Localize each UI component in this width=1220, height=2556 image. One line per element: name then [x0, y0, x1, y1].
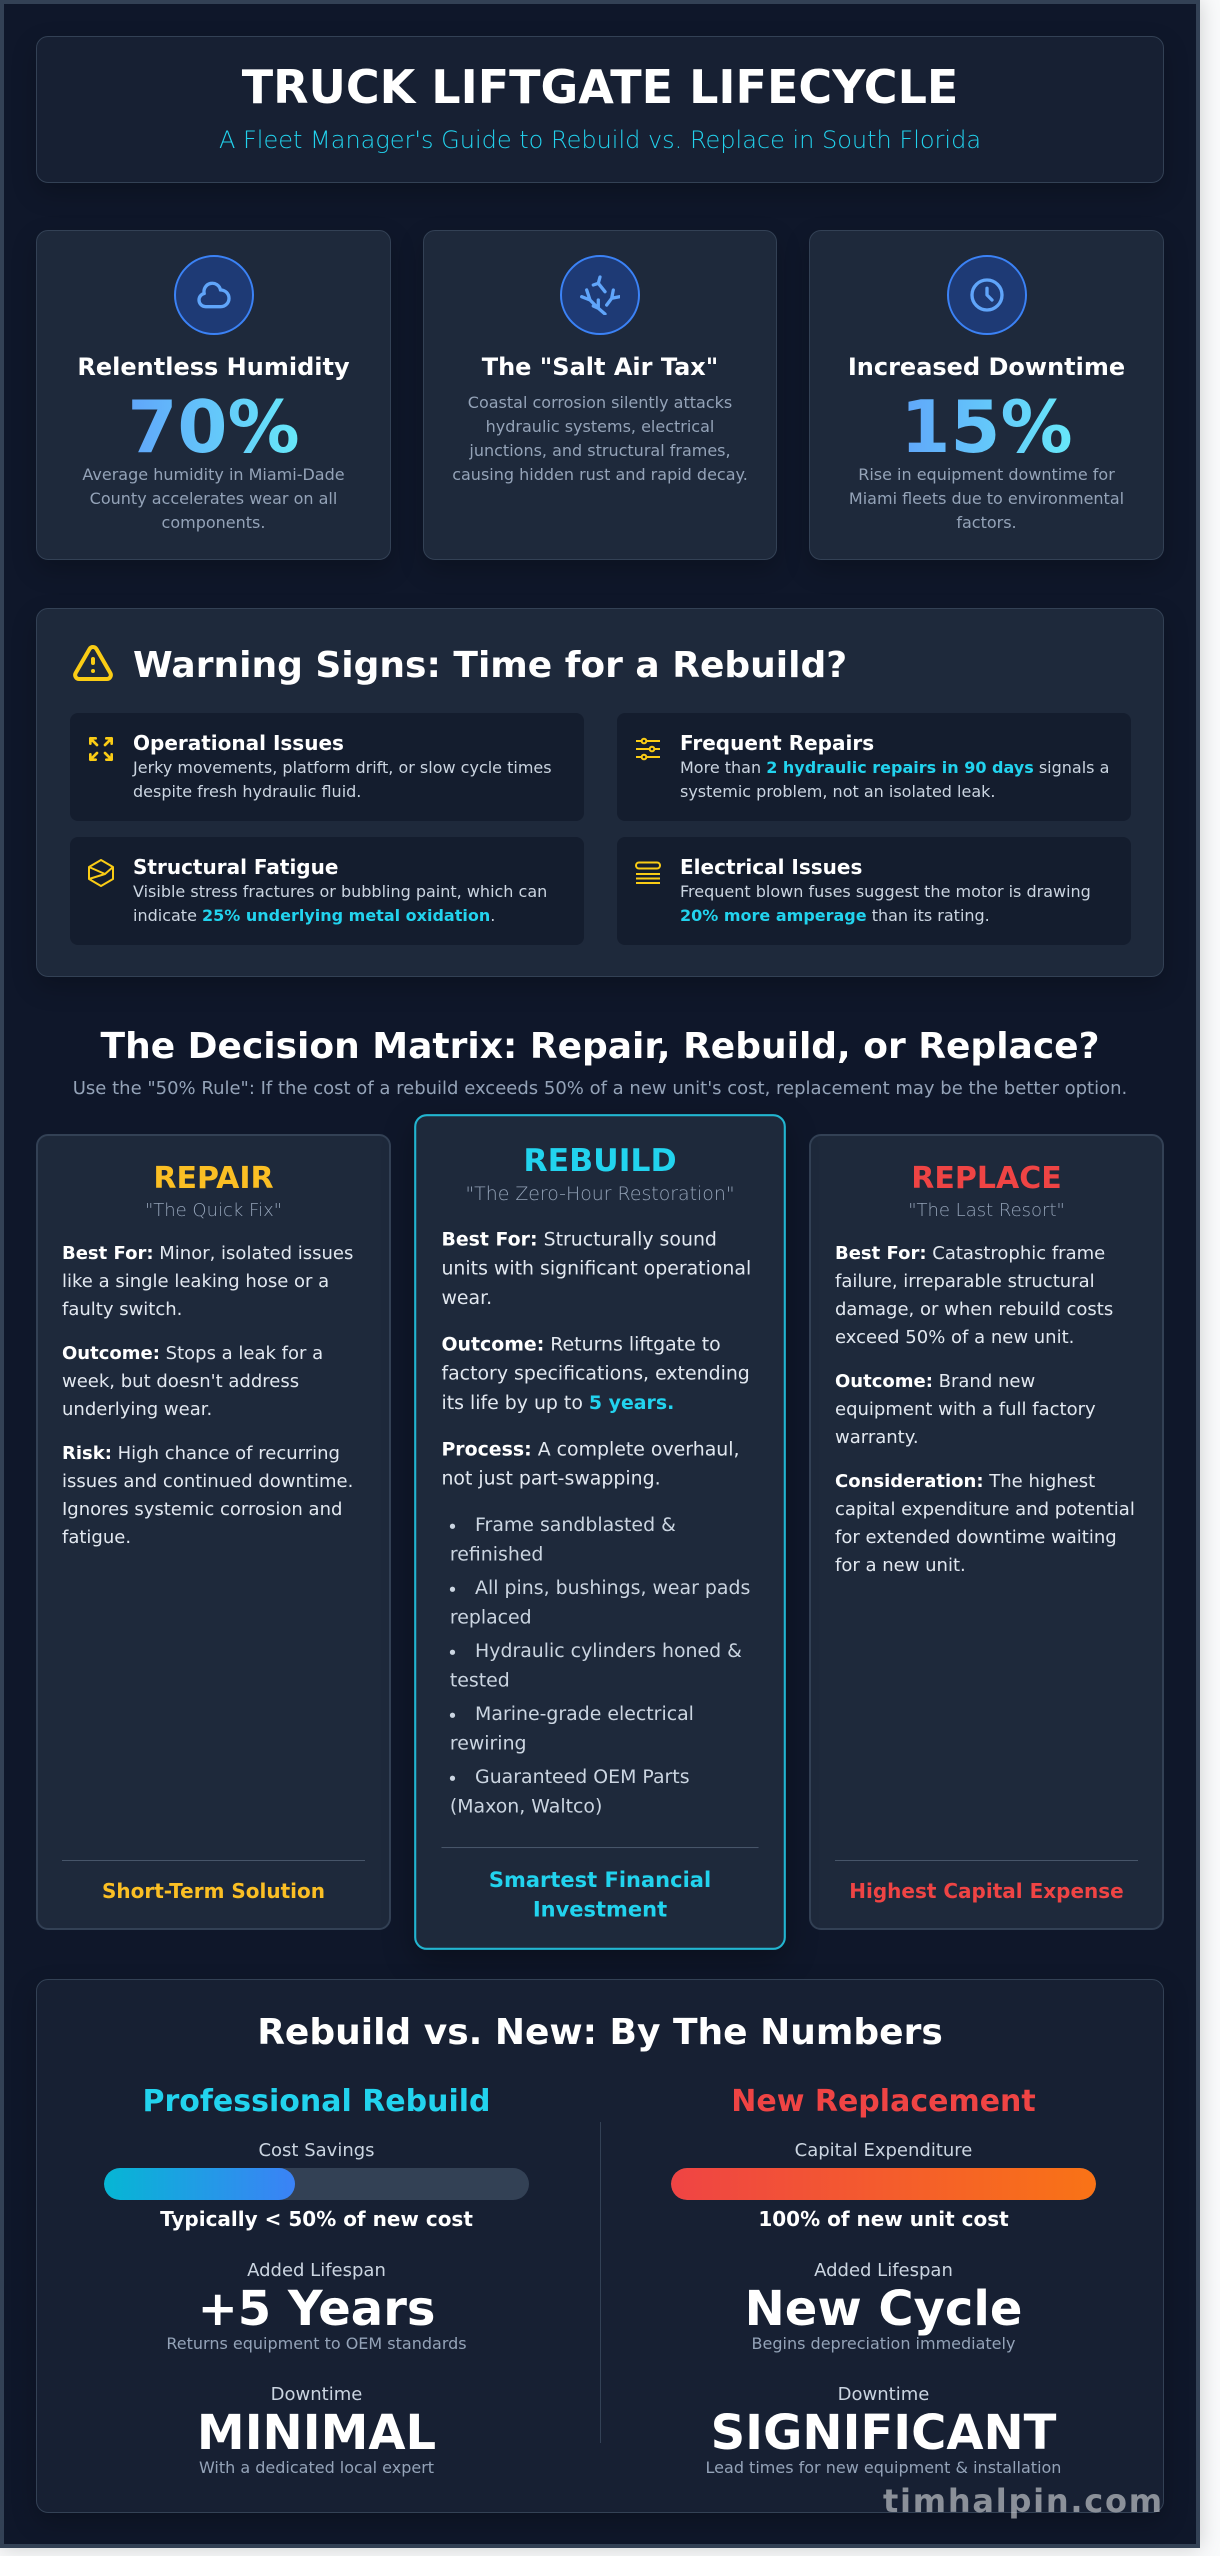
watermark: timhalpin.com	[883, 2482, 1164, 2520]
icon: sliders	[636, 738, 660, 760]
icon: hexagonal box	[88, 859, 114, 887]
note: Returns equipment to OEM standards	[166, 2334, 467, 2353]
big value: +5 Years	[198, 2281, 435, 2337]
heading: New Replacement	[731, 2084, 1036, 2119]
label: Added Lifespan	[247, 2260, 386, 2281]
heading: REPAIR	[153, 1161, 274, 1196]
text: risk: Risk: High chance of recurring issues and continued downtime. Ignores systemic corrosion and fatigue.	[62, 1443, 353, 1548]
verdict: Short-Term Solution	[102, 1879, 325, 1903]
heading: Warning Signs: Time for a Rebuild?	[133, 645, 847, 686]
value: Typically < 50% of new cost	[160, 2207, 473, 2231]
subtitle: A Fleet Manager's Guide to Rebuild vs. Replace in South Florida	[219, 126, 981, 154]
panel: increased downtime	[809, 230, 1164, 560]
label: Downtime	[838, 2384, 929, 2405]
panel: salt air tax	[423, 230, 777, 560]
icon: clock	[946, 255, 1026, 335]
numbers heading: Rebuild vs. New: By The Numbers	[257, 2012, 943, 2053]
big value: MINIMAL	[197, 2405, 436, 2461]
title: TRUCK LIFTGATE LIFECYCLE	[242, 60, 958, 114]
bar: capital expenditure 100%	[671, 2168, 1096, 2200]
item: electrical issues	[617, 837, 1131, 945]
stat: 70%: 70%	[127, 385, 300, 469]
icon: fuse stack	[635, 862, 661, 884]
label: Capital Expenditure	[795, 2140, 972, 2161]
text: Frequent blown fuses suggest the motor is drawing 20% more amperage than its rating.	[680, 882, 1091, 925]
tagline: "The Last Resort"	[908, 1200, 1065, 1221]
description: Coastal corrosion silently attacks hydraulic systems, electrical junctions, and structural frames, causing hidden rust and rapid decay.	[452, 393, 748, 484]
text: Jerky movements, platform drift, or slow cycle times despite fresh hydraulic fluid.	[133, 758, 552, 801]
process list: Hydraulic cylinders honed & tested	[450, 1640, 742, 1692]
heading: Increased Downtime	[848, 353, 1125, 381]
panel: rebuild	[414, 1114, 786, 1950]
column divider	[600, 2122, 601, 2443]
heading: The "Salt Air Tax"	[482, 353, 718, 381]
text: process: Process: A complete overhaul, not just part-swapping.	[441, 1439, 740, 1490]
item: operational issues	[70, 713, 584, 821]
process list	[450, 1514, 750, 1818]
item: frequent repairs	[617, 713, 1131, 821]
heading: Relentless Humidity	[77, 353, 350, 381]
description: Average humidity in Miami-Dade County accelerates wear on all components.	[82, 465, 345, 532]
verdict: Smartest Financial Investment	[489, 1867, 711, 1922]
text: best for: Best For: Structurally sound units with significant operational wear.	[441, 1229, 751, 1309]
text: Visible stress fractures or bubbling paint, which can indicate 25% underlying metal oxidation.	[133, 882, 547, 925]
heading: Operational Issues	[133, 731, 344, 755]
item: structural fatigue	[70, 837, 584, 945]
icon: cloud	[174, 255, 254, 335]
heading: REBUILD	[523, 1142, 677, 1179]
process list: Guaranteed OEM Parts (Maxon, Waltco)	[450, 1766, 690, 1818]
heading: REPLACE	[911, 1161, 1062, 1196]
bar: cost savings 45%	[104, 2168, 529, 2200]
text: best for: Best For: Catastrophic frame failure, irreparable structural damage, or when rebuild costs exceed 50% of a new unit.	[835, 1243, 1113, 1348]
process list: All pins, bushings, wear pads replaced	[450, 1577, 750, 1629]
decision matrix heading: The Decision Matrix: Repair, Rebuild, or Replace?	[101, 1026, 1099, 1067]
heading: Electrical Issues	[680, 855, 862, 879]
verdict	[62, 1860, 365, 1905]
label: Cost Savings	[258, 2140, 375, 2161]
heading: Frequent Repairs	[680, 731, 874, 755]
text: More than 2 hydraulic repairs in 90 days signals a systemic problem, not an isolated leak.	[680, 758, 1109, 801]
heading: Professional Rebuild	[142, 2084, 491, 2119]
header panel	[36, 36, 1164, 183]
note: Begins depreciation immediately	[752, 2334, 1015, 2353]
label: Downtime	[271, 2384, 362, 2405]
tagline: "The Zero-Hour Restoration"	[465, 1183, 735, 1205]
text: consideration: Consideration: The highest capital expenditure and potential for extended downtime waiting for a new unit.	[835, 1471, 1135, 1576]
panel: by the numbers	[36, 1979, 1164, 2513]
verdict: Highest Capital Expense	[849, 1879, 1124, 1903]
big value: SIGNIFICANT	[711, 2405, 1056, 2461]
column: new replacement	[671, 2084, 1096, 2477]
text: outcome: Outcome: Returns liftgate to factory specifications, extending its life by up to 5 years.	[441, 1334, 750, 1414]
process list: Marine-grade electrical rewiring	[450, 1703, 694, 1755]
heading: Structural Fatigue	[133, 855, 338, 879]
description: Rise in equipment downtime for Miami fleets due to environmental factors.	[849, 465, 1124, 532]
icon: corrosion cracks	[560, 255, 640, 335]
text: outcome: Outcome: Brand new equipment with a full factory warranty.	[835, 1371, 1096, 1448]
process list: Frame sandblasted & refinished	[450, 1514, 676, 1566]
panel: relentless humidity	[36, 230, 391, 560]
tagline: "The Quick Fix"	[145, 1200, 282, 1221]
note: With a dedicated local expert	[199, 2458, 434, 2477]
text: outcome: Outcome: Stops a leak for a week, but doesn't address underlying wear.	[62, 1343, 323, 1420]
column: professional rebuild	[104, 2084, 529, 2477]
verdict	[835, 1860, 1138, 1905]
panel: repair	[36, 1134, 391, 1930]
panel: replace	[809, 1134, 1164, 1930]
value: 100% of new unit cost	[758, 2207, 1009, 2231]
icon: warning triangle	[73, 645, 113, 681]
text: best for: Best For: Minor, isolated issues like a single leaking hose or a faulty switch.	[62, 1243, 353, 1320]
big value: New Cycle	[745, 2281, 1022, 2337]
stat: 15%: 15%	[900, 385, 1073, 469]
verdict	[441, 1847, 759, 1924]
note: Lead times for new equipment & installation	[706, 2458, 1061, 2477]
panel: warning signs	[36, 608, 1164, 977]
icon: expand arrows	[88, 736, 114, 762]
label: Added Lifespan	[814, 2260, 953, 2281]
decision matrix subtitle: Use the "50% Rule": If the cost of a rebuild exceeds 50% of a new unit's cost, replacement may be the better option.	[73, 1078, 1127, 1099]
